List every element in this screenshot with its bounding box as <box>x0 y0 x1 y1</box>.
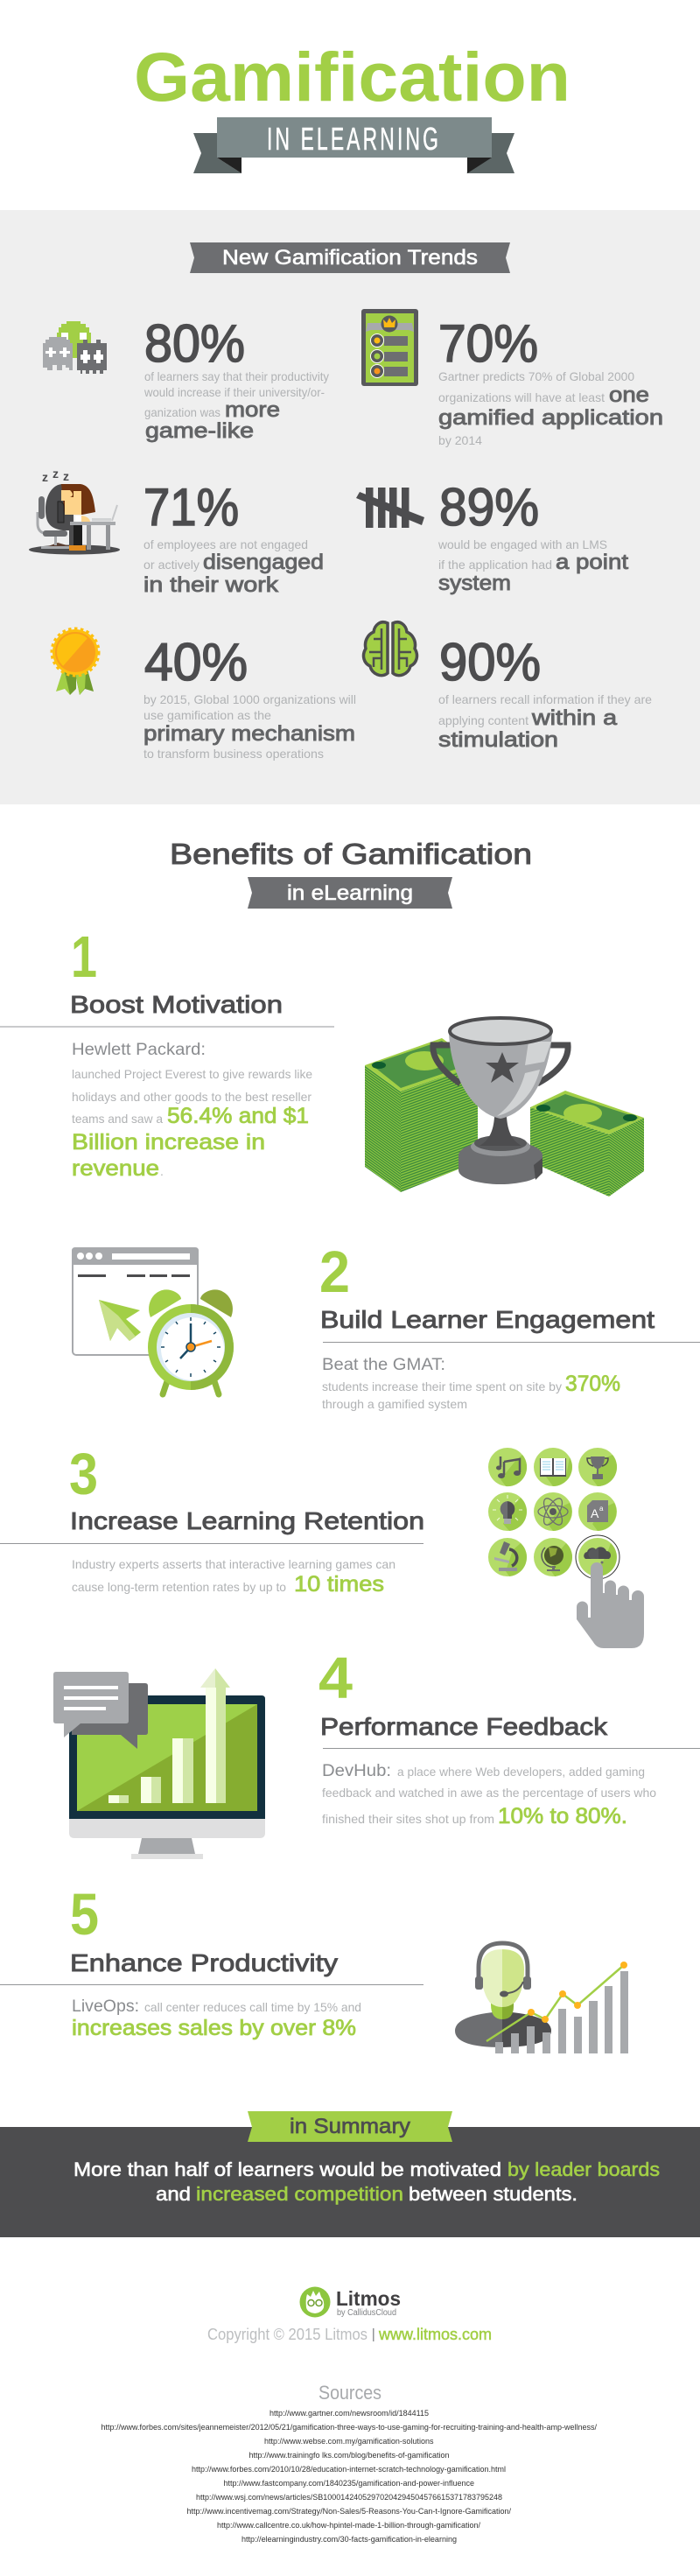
text: hewlett packard: Hewlett Packard: <box>72 1041 206 1059</box>
list: source urls: http://www.wsj.com/news/articles/SB10001424052970204294504576615371783795248 <box>196 2493 502 2502</box>
stat: 89%: system <box>438 572 511 595</box>
illustration: call agent and sales chart <box>455 1943 628 2053</box>
icon: sleeping worker at desk <box>29 467 120 555</box>
text: devhub: a place where Web developers, added gaming <box>397 1765 645 1779</box>
text: devhub: 10% to 80%. <box>498 1804 627 1828</box>
icon: sleeping worker at desk: z <box>42 470 48 484</box>
stat: 70%: 70% <box>438 314 538 373</box>
ribbon: in elearning <box>248 877 452 909</box>
stat: 80%: 80% <box>144 314 245 373</box>
section 4: performance feedback <box>53 1646 700 1859</box>
icon: light bulb <box>488 1492 527 1531</box>
text: liveops <box>72 1997 361 2040</box>
stat: 80%: game-like <box>145 419 254 443</box>
icon: sleeping worker at desk: z <box>52 467 59 481</box>
section 5: enhance productivity <box>0 1882 628 2053</box>
heading: boost motivation: Boost Motivation <box>70 991 283 1018</box>
list: source urls: http://www.forbes.com/2010/10/28/education-internet-scratch-technology-gamification.html <box>192 2465 506 2474</box>
text: liveops: LiveOps: <box>72 1997 139 2016</box>
icon: brain <box>364 622 416 676</box>
copyright line: www.litmos.com <box>378 2326 492 2343</box>
logo: litmos: by CallidusCloud <box>337 2308 396 2318</box>
stat: 89%: 89% <box>439 478 539 537</box>
stat: 71%: or actively <box>144 558 200 572</box>
text: liveops: increases sales by over 8% <box>72 2016 356 2040</box>
stat: 40%: primary mechanism <box>144 722 355 746</box>
text: devhub <box>322 1762 656 1828</box>
ribbon: in summary <box>248 2111 452 2142</box>
stat: 90% <box>438 633 652 752</box>
heading: benefits of gamification: Benefits of Gamification <box>170 838 532 870</box>
stat: 80%: of learners say that their productivity <box>144 369 329 383</box>
list: source urls <box>102 2409 597 2544</box>
stat: 40%: 40% <box>144 633 248 691</box>
stat: 70%: organizations will have at least <box>438 390 605 404</box>
stat: 70%: gamified application <box>438 406 663 430</box>
number 4: 4 <box>318 1646 353 1711</box>
stat: 70%: by 2014 <box>438 433 482 447</box>
stat: 70%: Gartner predicts 70% of Global 2000 <box>438 369 634 383</box>
text: beat the gmat <box>322 1356 620 1411</box>
ribbon heading: new gamification trends: New Gamification Trends <box>222 246 478 270</box>
text: devhub: finished their sites shot up from <box>322 1812 494 1826</box>
summary text <box>74 2158 660 2205</box>
stat: 89%: if the application had <box>438 558 552 572</box>
banner: in elearning: IN ELEARNING <box>267 121 441 157</box>
list: source urls: http://www.gartner.com/newsroom/id/1844115 <box>270 2409 429 2418</box>
icon: atom <box>534 1492 572 1531</box>
text: retention <box>72 1557 396 1597</box>
ribbon: in elearning: in eLearning <box>287 881 413 905</box>
stat: 80% <box>144 314 329 443</box>
illustration: browser and alarm clock <box>72 1247 234 1394</box>
stat: 71%: in their work <box>144 573 279 597</box>
list: source urls: http://www.callcentre.co.uk/how-hpintel-made-1-billion-through-gamification/ <box>217 2521 480 2530</box>
title: Gamification <box>134 38 570 116</box>
stat: 90%: 90% <box>439 633 541 691</box>
section 2: build learner engagement <box>72 1239 700 1411</box>
panel: in summary <box>0 2111 700 2237</box>
heading: enhance productivity: Enhance Productivity <box>70 1949 338 1976</box>
text: retention: Industry experts asserts that interactive learning games can <box>72 1557 396 1571</box>
stat: 80%: more <box>225 398 280 422</box>
heading: increase learning retention: Increase Learning Retention <box>70 1507 424 1534</box>
icon: award ribbon <box>52 628 99 695</box>
ribbon heading: new gamification trends <box>190 242 510 273</box>
icon: trophy <box>578 1448 617 1486</box>
icon: cloud with selection ring <box>576 1535 620 1579</box>
list: source urls: http://www.incentivemag.com/Strategy/Non-Sales/5-Reasons-You-Can-t-Ignore-Gamification/ <box>187 2507 511 2516</box>
list: source urls: http://www.forbes.com/sites/jeannemeister/2012/05/21/gamification-three-ways-to-use-gaming-for-recruiting-training-and-health-amp-wellness/ <box>102 2423 597 2432</box>
icon: pointing hand <box>577 1562 644 1648</box>
icon: leaderboard <box>361 309 418 386</box>
section 3: increase learning retention <box>0 1442 644 1648</box>
stat: 90%: of learners recall information if they are <box>438 692 652 706</box>
icon: tally marks <box>356 488 424 528</box>
section 1: boost motivation <box>0 924 644 1197</box>
text: hewlett packard: 56.4% and $1 <box>167 1104 309 1128</box>
logo: litmos <box>299 2286 401 2318</box>
icon: typography: a <box>599 1505 604 1513</box>
stat: 80%: would increase if their university/or- <box>144 385 325 399</box>
text: beat the gmat: Beat the GMAT: <box>322 1356 445 1374</box>
icon: typography: A <box>591 1506 599 1520</box>
stat: 71%: 71% <box>144 478 239 537</box>
text: liveops: call center reduces call time by 15% and <box>144 2000 361 2014</box>
logo: litmos: Litmos <box>336 2287 401 2310</box>
illustration: monitor with growth chart <box>53 1668 265 1859</box>
summary text: increased competition <box>196 2183 403 2205</box>
stat: 89% <box>438 478 628 595</box>
stat: 40%: to transform business operations <box>144 747 324 761</box>
number 3: 3 <box>69 1442 98 1507</box>
text: hewlett packard: revenue <box>72 1156 159 1181</box>
icon: pixel ghosts <box>43 321 107 374</box>
stat: 40%: use gamification as the <box>144 708 271 722</box>
number 5: 5 <box>70 1882 99 1948</box>
stat: 70%: one <box>609 383 649 407</box>
list: source urls: http://www.fastcompany.com/1840235/gamification-and-power-influence <box>224 2479 474 2488</box>
summary text: by leader boards <box>508 2158 660 2180</box>
summary text: More than half of learners would be motivated <box>74 2158 501 2180</box>
icon: typography <box>578 1492 617 1531</box>
summary text: between students. <box>409 2183 578 2205</box>
panel: new gamification trends <box>0 210 700 804</box>
heading: sources: Sources <box>318 2382 382 2404</box>
text: hewlett packard: . <box>160 1164 164 1178</box>
illustration: trophy and money stacks <box>365 1018 644 1197</box>
icon: microscope <box>488 1538 527 1576</box>
stat: 70% <box>438 314 663 447</box>
stat: 89%: would be engaged with an LMS <box>438 537 607 551</box>
text: hewlett packard: Billion increase in <box>72 1130 265 1155</box>
number 1: 1 <box>71 924 97 990</box>
icon grid: learning subjects <box>488 1448 620 1579</box>
copyright line <box>207 2326 492 2343</box>
stat: 90%: within a <box>531 706 618 730</box>
list: source urls: http://elearningindustry.com/30-facts-gamification-in-elearning <box>242 2535 457 2544</box>
text: retention: cause long-term retention rates by up to <box>72 1580 286 1594</box>
copyright line: Copyright © 2015 Litmos <box>207 2326 368 2343</box>
stat: 90%: applying content <box>438 713 528 727</box>
text: hewlett packard: launched Project Everest to give rewards like <box>72 1067 312 1081</box>
text: retention: 10 times <box>294 1572 384 1597</box>
icon: music <box>488 1448 527 1486</box>
number 2: 2 <box>319 1239 350 1305</box>
stat: 80%: ganization was <box>144 405 220 419</box>
text: devhub: DevHub: <box>322 1762 391 1780</box>
stat: 89%: a point <box>556 551 628 574</box>
list: source urls: http://www.trainingfo lks.com/blog/benefits-of-gamification <box>248 2451 450 2460</box>
stat: 90%: stimulation <box>438 728 558 752</box>
stat: 40%: by 2015, Global 1000 organizations will <box>144 692 356 706</box>
stat: 71%: of employees are not engaged <box>144 537 308 551</box>
text: beat the gmat: through a gamified system <box>322 1397 467 1411</box>
summary text: and <box>156 2183 191 2205</box>
text: hewlett packard: holidays and other goods to the best reseller <box>72 1090 312 1104</box>
heading: performance feedback: Performance Feedback <box>320 1713 608 1740</box>
stat: 40% <box>144 633 356 761</box>
icon: book <box>534 1448 572 1486</box>
heading: build learner engagement: Build Learner Engagement <box>320 1306 654 1333</box>
text: beat the gmat: students increase their time spent on site by <box>322 1379 562 1393</box>
text: hewlett packard: teams and saw a <box>72 1112 163 1126</box>
banner: in elearning <box>193 117 514 173</box>
icon: sleeping worker at desk: z <box>63 469 69 483</box>
list: source urls: http://www.webse.com.my/gamification-solutions <box>264 2437 434 2446</box>
text: devhub: feedback and watched in awe as the percentage of users who <box>322 1786 656 1800</box>
text: hewlett packard <box>72 1041 312 1181</box>
stat: 71%: disengaged <box>203 551 324 574</box>
text: beat the gmat: 370% <box>565 1372 620 1396</box>
icon: globe <box>534 1538 572 1576</box>
ribbon: in summary: in Summary <box>290 2115 410 2138</box>
stat: 71% <box>144 478 324 597</box>
